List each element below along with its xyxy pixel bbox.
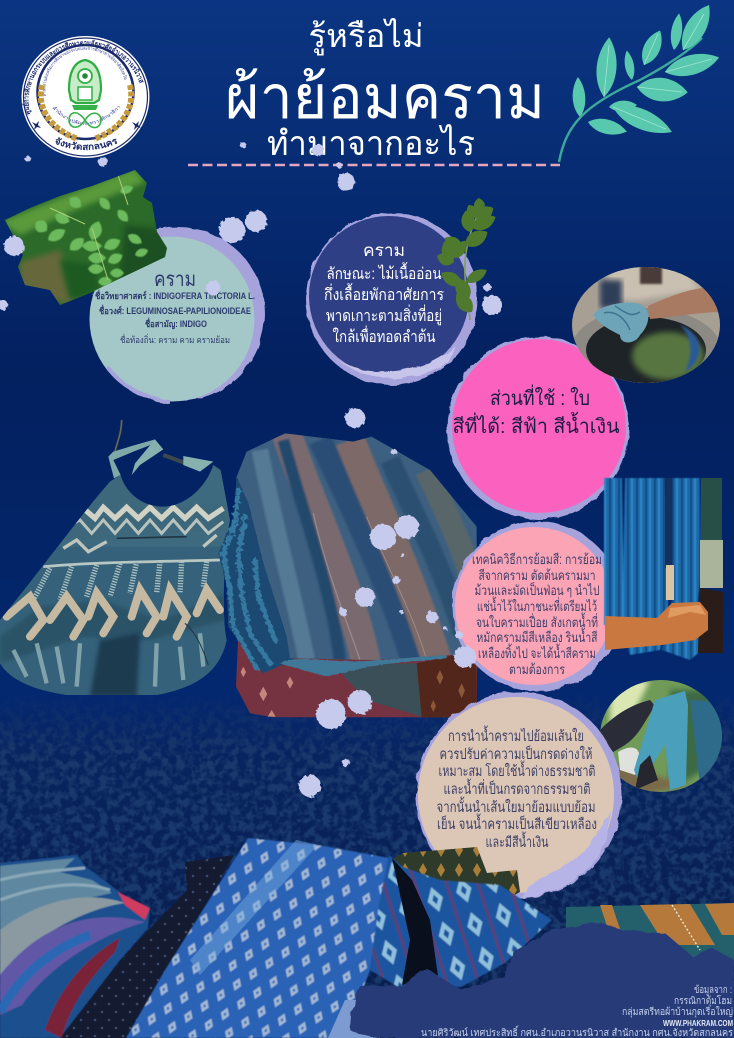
icon: teal leaf branch (559, 0, 722, 162)
text: dyeing technique: สีจากคราม ตัดต้นครามมา (478, 568, 596, 583)
text: dyeing technique: เหลืองทิ้งไป จะได้น้ำสีคราม (478, 643, 596, 661)
text: dyeing technique: ม้วนและมัดเป็นฟ่อน ๆ นำไป (474, 581, 600, 598)
text: parts and colours: สีที่ได้: สีฟ้า สีน้ำเงิน (452, 412, 620, 438)
photo: stacked ikat fabrics at bottom (0, 838, 734, 1038)
text: parts and colours (452, 384, 620, 438)
photo: indigo plant leaves (5, 170, 167, 305)
logo (22, 36, 150, 158)
text: dyeing technique: ตามต้องการ (509, 662, 565, 677)
panel: indigo taxonomy circle (90, 227, 265, 402)
text: indigo description: พาดเกาะตามสิ่งที่อยู่ (326, 304, 442, 326)
text: indigo description: คราม (363, 241, 405, 260)
text: indigo plant names: ชื่อวงศ์: LEGUMINOSAE-PAPILIONOIDEAE (99, 304, 251, 316)
garment: folded indigo cloth with fringe (218, 433, 480, 677)
text: indigo plant names: ชื่อวิทยาศาสตร์ : INDIGOFERA TINCTORIA L. (95, 289, 255, 301)
panel: indigo description circle (306, 213, 478, 385)
decorative ink splats (0, 142, 502, 797)
text: pH and dyeing method: และมีสีน้ำเงิน (486, 831, 549, 851)
text: dyeing technique: จนใบครามเปื่อย สังเกตน้ำที่ (476, 612, 598, 630)
text: pH and dyeing method: จากนั้นนำเส้นใยมาย้อมแบบย้อม (436, 796, 596, 816)
text: pH and dyeing method: และน้ำที่เป็นกรดจากธรรมชาติ (444, 778, 590, 798)
photo: indigo pot (572, 267, 720, 383)
text: pH and dyeing method: ควรปรับค่าความเป็นกรดด่างให้ (440, 744, 592, 763)
fabric: main blue ikat (126, 838, 389, 1038)
icon: green sprig (435, 198, 498, 320)
text: indigo description: ใกล้เพื่อทอดลำต้น (332, 325, 436, 346)
logo: ศูนย์การศึกษานอกระบบและการศึกษาตามอัธยาศัยอำเภอวานรนิวาส (22, 40, 144, 114)
title: ทำมาจากอะไร (267, 124, 475, 163)
title: รู้หรือไม่ (308, 18, 424, 56)
text: indigo description: ลักษณะ: ไม้เนื้ออ่อน (326, 262, 442, 283)
fabric: right blue ikat (370, 855, 552, 987)
logo: สำนักงานส่งเสริมการศึกษานอกระบบและการศึกษาตามอัธยาศัยจังหวัด (42, 47, 127, 96)
panel: dyeing technique circle (452, 521, 622, 691)
text: indigo plant names: ชื่อสามัญ: INDIGO (145, 317, 207, 330)
text: pH and dyeing method: การนำน้ำครามไปย้อมเส้นใย (448, 725, 584, 745)
text: indigo description: กึ่งเลื้อยพักอาศัยการ (324, 283, 444, 304)
fabric: dark fold (392, 858, 440, 990)
shape: dark blue torn paper cloud (350, 922, 734, 1038)
text: indigo plant names (95, 269, 255, 345)
fabric: right striped (566, 903, 734, 965)
fabric: left folded stack (0, 855, 150, 1038)
photo: garments (0, 420, 480, 717)
photo: hand lifting dyed cloth (598, 678, 724, 795)
logo: จังหวัดสกลนคร (56, 137, 117, 150)
panel: pH and dyeing circle (416, 692, 622, 898)
text: dyeing technique (472, 552, 602, 677)
garment: ikat sleeveless dress (0, 420, 230, 697)
photo: blue yarn and arm (604, 478, 723, 660)
fabric: dark backing (60, 855, 234, 1038)
text: pH and dyeing method (436, 725, 597, 851)
text: pH and dyeing method: เหมาะสม โดยใช้น้ำด่างธรรมชาติ (438, 760, 596, 780)
text: indigo plant names: คราม (154, 269, 196, 291)
text: parts and colours: ส่วนที่ใช้ : ใบ (490, 384, 590, 410)
text: dyeing technique: แช่น้ำไว้ในภาชนะที่เตรียมไว้ (477, 596, 597, 614)
text: pH and dyeing method: เย็น จนน้ำครามเป็นสีเขียวเหลือง (437, 813, 597, 833)
fabric: orange pattern (390, 847, 520, 925)
garment: red fabric beneath (236, 633, 477, 717)
title (225, 18, 545, 163)
text: dyeing technique: หมักครามมีสีเหลือง รินน้ำสี (476, 627, 598, 645)
panel: parts used circle (447, 337, 629, 519)
title: ผ้าย้อมคราม (225, 64, 545, 131)
shape: pale corner (328, 1000, 380, 1038)
text: indigo plant names: ชื่อท้องถิ่น: คราม คาม ครามย้อม (120, 333, 230, 345)
text: indigo description (324, 241, 444, 346)
fabric: highlight on folded edge (190, 840, 318, 975)
text: dyeing technique: เทคนิควิธีการย้อมสี: การย้อม (472, 552, 602, 567)
text: credits (421, 984, 734, 1038)
